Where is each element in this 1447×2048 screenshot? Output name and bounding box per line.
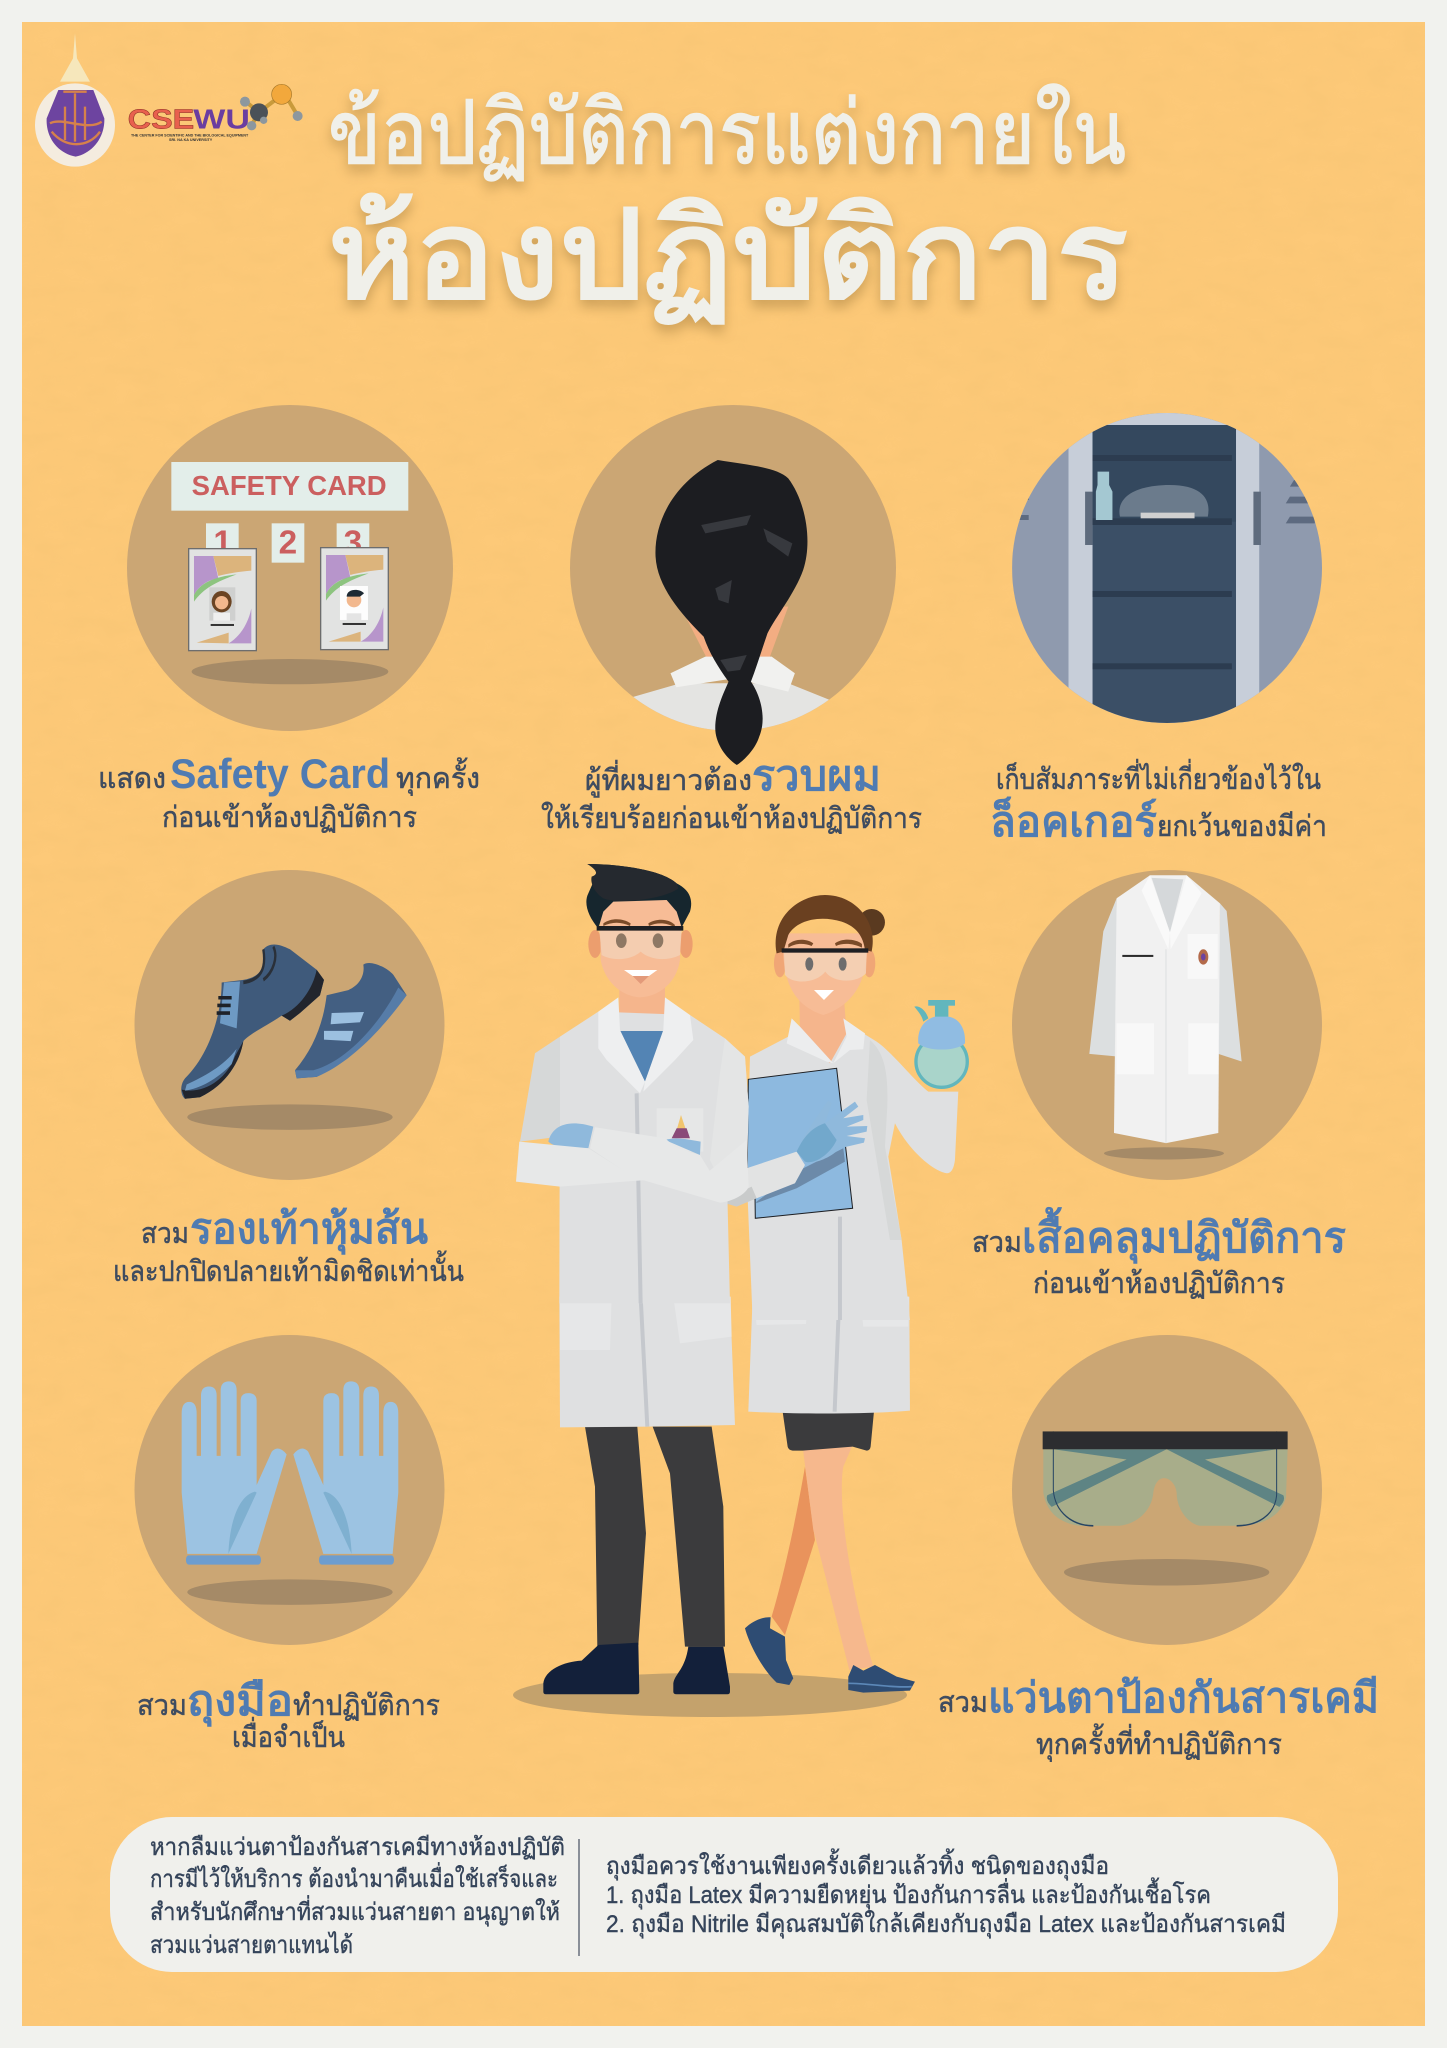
logo: CSEWU: WU (193, 103, 250, 134)
caption: ผู้ที่ผมยาวต้อง (585, 760, 752, 798)
circle background (134, 1335, 444, 1645)
circle background (134, 870, 444, 1180)
left note: หากลืมแว่นตาป้องกันสารเคมีทางห้องปฏิบัติ (150, 1834, 565, 1861)
notes panel (110, 1817, 1338, 1972)
logo: CSEWU (128, 84, 303, 142)
woman scientist (720, 895, 967, 1693)
flask (914, 1000, 967, 1087)
man's head (586, 864, 693, 997)
caption (113, 1205, 464, 1288)
left note (150, 1834, 565, 1959)
caption: ทุกครั้ง (396, 757, 480, 796)
folder (747, 1068, 853, 1218)
id card right (321, 548, 388, 650)
caption: สวม (137, 1690, 187, 1722)
caption: รองเท้าหุ้มส้น (190, 1205, 428, 1255)
title (328, 83, 1128, 326)
illustration: lab coat (1089, 875, 1242, 1159)
illustration: safety card board: 1 (213, 524, 232, 561)
arms crossed (516, 1108, 749, 1203)
right note: 1. ถุงมือ Latex มีความยืดหยุ่น ป้องกันการลื่น และป้องกันเชื้อโรค (606, 1877, 1211, 1910)
logo: CSEWU: THE CENTER FOR SCIENTIFIC AND THE BIOLOGICAL EQUIPMENT (131, 133, 249, 137)
caption: ยกเว้นของมีค่า (1157, 811, 1327, 843)
caption: สวม (938, 1687, 988, 1719)
caption: Safety Card (170, 750, 390, 797)
caption: ก่อนเข้าห้องปฏิบัติการ (162, 802, 417, 834)
caption: ทุกครั้งที่ทำปฏิบัติการ (1036, 1723, 1282, 1762)
logo: CSEWU: SRI. NA KA UNIVERSITY (169, 138, 213, 142)
circle background (127, 405, 453, 731)
right note: 2. ถุงมือ Nitrile มีคุณสมบัติใกล้เคียงกับถุงมือ Latex และป้องกันสารเคมี (606, 1910, 1286, 1939)
panel: safety card (98, 405, 480, 834)
left note: สำหรับนักศึกษาที่สวมแว่นสายตา อนุญาตให้ (150, 1895, 560, 1927)
panel: lab coat (972, 870, 1346, 1300)
floor shadow (513, 1673, 907, 1717)
illustration: safety card board (171, 462, 408, 684)
illustration: safety card board: SAFETY CARD (192, 470, 387, 501)
caption: ให้เรียบร้อยก่อนเข้าห้องปฏิบัติการ (541, 801, 922, 835)
icon: molecule (240, 84, 303, 130)
caption (98, 750, 480, 834)
caption: ล็อคเกอร์ (990, 796, 1157, 845)
title line 2: ห้องปฏิบัติการ (328, 187, 1128, 326)
floor shadow (192, 659, 388, 684)
caption: สวม (972, 1227, 1022, 1259)
caption: ก่อนเข้าห้องปฏิบัติการ (1033, 1268, 1285, 1300)
panel: safety goggles (938, 1335, 1379, 1762)
caption: เก็บสัมภาระที่ไม่เกี่ยวข้องไว้ใน (996, 759, 1321, 796)
illustration: shoes (181, 944, 407, 1130)
illustration: safety card board: 2 (279, 524, 297, 561)
panel: closed shoes (113, 870, 464, 1288)
caption: เมื่อจำเป็น (232, 1717, 345, 1754)
left note: การมีไว้ให้บริการ ต้องนำมาคืนเมื่อใช้เสร็จและ (150, 1862, 558, 1893)
caption: ถุงมือ (187, 1677, 293, 1727)
circle background (1012, 870, 1322, 1180)
panel: locker (990, 410, 1327, 845)
caption: เสื้อคลุมปฏิบัติการ (1022, 1206, 1346, 1264)
caption: และปกปิดปลายเท้ามิดชิดเท่านั้น (113, 1250, 464, 1288)
man scientist (516, 864, 749, 1694)
circle background (1012, 1335, 1322, 1645)
woman's arm and glove (720, 1101, 867, 1207)
title line 1: ข้อปฏิบัติการแต่งกายใน (328, 83, 1126, 182)
logo: university seal (35, 33, 115, 167)
panel: gloves (134, 1335, 444, 1754)
caption (972, 1206, 1346, 1300)
woman's head (774, 895, 885, 1063)
caption: แว่นตาป้องกันสารเคมี (988, 1674, 1379, 1721)
illustration: scientists (513, 864, 967, 1717)
right note: ถุงมือควรใช้งานเพียงครั้งเดียวแล้วทิ้ง ชนิดของถุงมือ (606, 1848, 1109, 1881)
caption: รวบผม (752, 752, 881, 799)
caption (990, 759, 1327, 845)
caption: สวม (141, 1218, 189, 1250)
id card left (189, 549, 256, 651)
illustration: locker (1012, 410, 1327, 727)
circle background (570, 405, 896, 731)
illustration: safety card board: 3 (344, 524, 362, 561)
illustration: goggles (1043, 1431, 1288, 1586)
illustration: shoulders and collar (633, 606, 829, 730)
caption: ทำปฏิบัติการ (293, 1690, 440, 1722)
left note: สวมแว่นสายตาแทนได้ (150, 1931, 353, 1959)
caption (137, 1677, 440, 1754)
illustration: gloves (182, 1381, 398, 1605)
panel: tie hair (541, 405, 922, 835)
caption (541, 752, 922, 835)
rounded box (110, 1817, 1338, 1972)
right note (606, 1848, 1286, 1939)
logo: CSEWU: CSE (128, 103, 194, 134)
caption (938, 1674, 1379, 1762)
caption: แสดง (98, 763, 166, 795)
illustration: braided hair (655, 460, 807, 765)
